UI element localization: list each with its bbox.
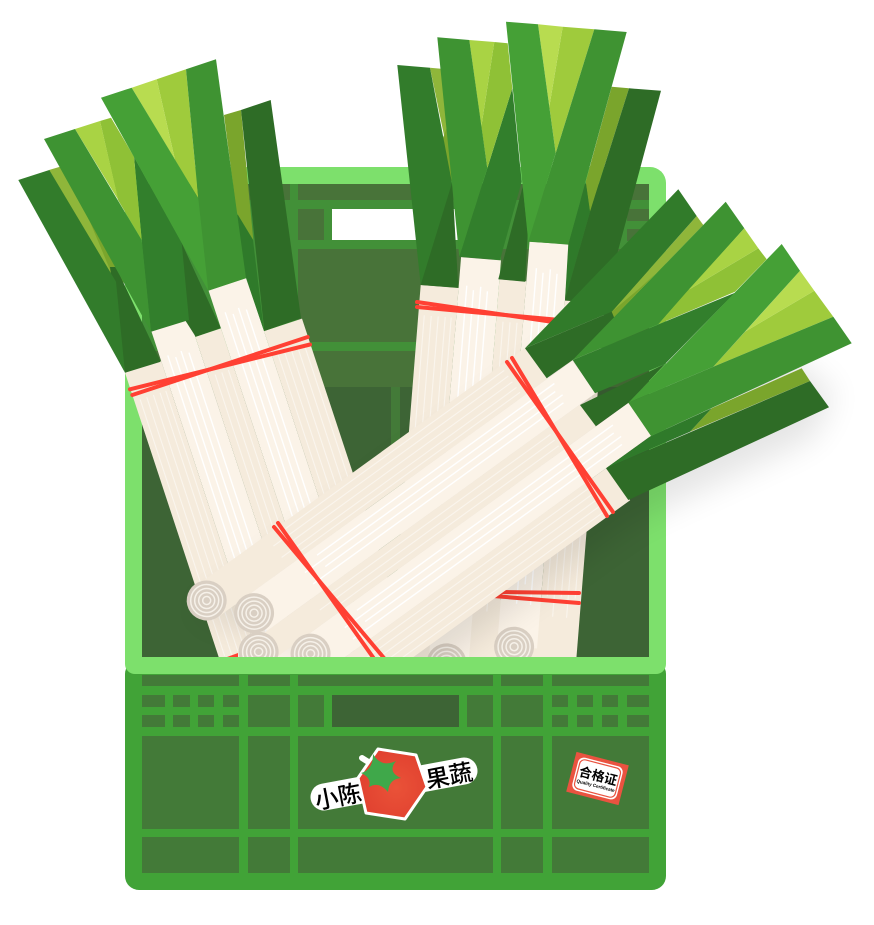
rubber band: diagonal bunch near roots — [274, 523, 394, 670]
leek bunch: diagonal front — [179, 189, 852, 747]
shadow of diagonal bunch — [194, 262, 834, 679]
rubber band fragment above rim — [227, 653, 238, 657]
crate front rim — [125, 657, 666, 674]
sticker subtitle: Quality Certificate — [576, 778, 616, 793]
logo: 小陈果蔬 — [313, 749, 475, 819]
logo green star — [361, 754, 401, 792]
front slot — [332, 695, 459, 727]
crate handle opening — [332, 209, 459, 240]
sticker title: 合格证 — [577, 764, 619, 788]
logo text left: 小陈 — [313, 780, 364, 814]
rubber band: middle bunch bottom — [493, 592, 579, 603]
logo text right: 果蔬 — [424, 759, 475, 793]
leek bunch: middle — [385, 22, 661, 725]
rubber band: middle bunch top — [417, 302, 560, 323]
quality certificate sticker — [566, 752, 629, 805]
logo tomato hexagon — [358, 749, 427, 819]
rubber band: left bunch — [130, 337, 310, 395]
leek bunch: left — [18, 59, 434, 778]
logo stem nub — [362, 758, 370, 763]
crate front panel — [125, 660, 666, 890]
rubber band: diagonal bunch near leaves — [507, 358, 613, 516]
crate back wall — [125, 167, 666, 674]
